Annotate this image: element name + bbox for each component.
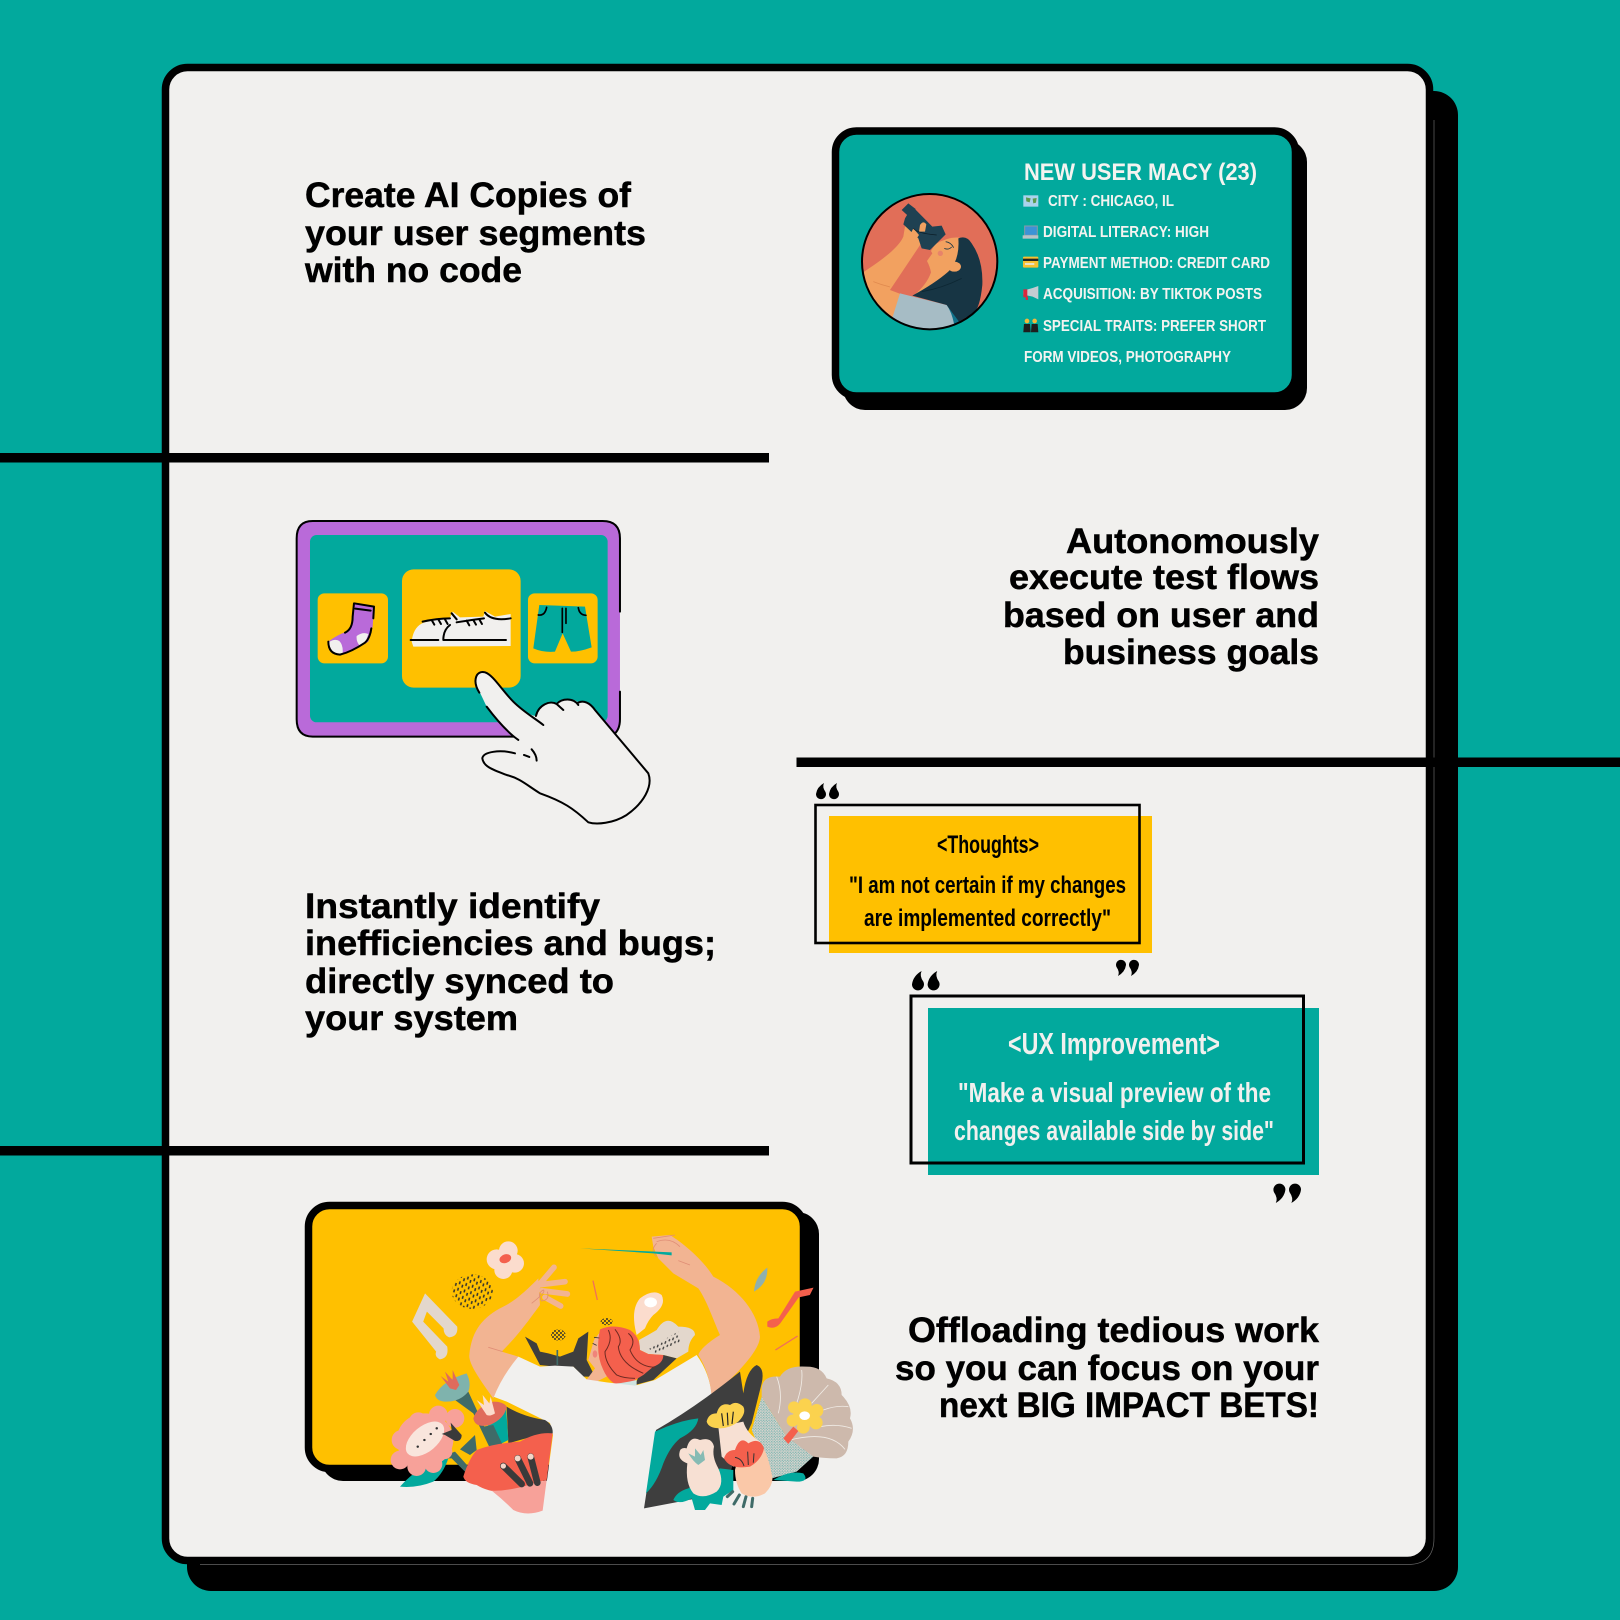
heading: autonomous test flows: Autonomously xyxy=(1066,522,1320,561)
opening quote mark xyxy=(816,783,839,799)
callout text: <Thoughts> xyxy=(937,831,1039,859)
heading: autonomous test flows: execute test flows xyxy=(1009,558,1319,597)
heading: autonomous test flows: based on user and xyxy=(1003,596,1319,635)
heading: offloading tedious work xyxy=(895,1311,1320,1425)
heading: autonomous test flows: business goals xyxy=(1063,633,1319,672)
outline frame xyxy=(911,996,1304,1163)
illustration: right flower bouquet xyxy=(644,1365,853,1510)
tablet body xyxy=(297,521,620,737)
persona card body xyxy=(836,131,1296,396)
heading: create AI copies xyxy=(304,176,646,290)
persona text: DIGITAL LITERACY: HIGH xyxy=(1043,224,1209,241)
floating flower xyxy=(487,1241,524,1279)
hair and head xyxy=(525,1332,595,1377)
heading: create AI copies: your user segments xyxy=(305,214,646,253)
heading: autonomous test flows xyxy=(1003,522,1320,672)
baton xyxy=(580,1248,672,1255)
persona text xyxy=(1024,159,1270,366)
persona text: SPECIAL TRAITS: PREFER SHORT xyxy=(1043,318,1266,335)
main card panel xyxy=(166,68,1430,1560)
heading: create AI copies: Create AI Copies of xyxy=(305,176,631,215)
product: sock xyxy=(318,593,388,663)
heading: instantly identify: your system xyxy=(305,999,518,1038)
callout text xyxy=(954,1026,1274,1146)
portrait: woman with binoculars xyxy=(858,194,997,332)
persona text: CITY : CHICAGO, IL xyxy=(1048,193,1174,210)
product: shorts xyxy=(528,593,598,663)
white shirt xyxy=(493,1355,712,1510)
hand pointer xyxy=(476,672,650,823)
heading: offloading tedious work: next BIG IMPACT BETS! xyxy=(939,1386,1319,1425)
panel: yellow conductor card xyxy=(308,1206,853,1513)
bubble and cloud xyxy=(634,1292,663,1335)
callout text: are implemented correctly" xyxy=(864,905,1111,932)
persona text: PAYMENT METHOD: CREDIT CARD xyxy=(1043,255,1270,272)
persona text: NEW USER MACY (23) xyxy=(1024,159,1257,186)
closing quote mark xyxy=(1273,1184,1301,1203)
conductor card shadow xyxy=(321,1212,819,1481)
heading: offloading tedious work: Offloading tedious work xyxy=(908,1311,1320,1350)
heading: instantly identify xyxy=(305,887,716,1038)
callout: thoughts quote xyxy=(816,783,1152,976)
illustration: tablet with touching hand xyxy=(297,521,650,823)
heading: instantly identify: directly synced to xyxy=(305,962,614,1001)
outline frame xyxy=(816,805,1140,943)
heading: instantly identify: Instantly identify xyxy=(305,887,601,926)
yellow backing xyxy=(829,816,1152,953)
callout text: "I am not certain if my changes xyxy=(849,872,1126,899)
persona text: ACQUISITION: BY TIKTOK POSTS xyxy=(1043,286,1262,303)
callout text: changes available side by side" xyxy=(954,1115,1274,1146)
persona card shadow xyxy=(843,140,1307,410)
persona text: FORM VIDEOS, PHOTOGRAPHY xyxy=(1024,349,1231,366)
illustration: left flower bouquet xyxy=(391,1370,553,1513)
arms xyxy=(469,1278,540,1398)
tablet screen xyxy=(310,535,608,722)
main card shadow xyxy=(187,91,1458,1591)
callout text xyxy=(849,831,1126,932)
opening quote mark xyxy=(912,971,940,990)
heading: instantly identify: inefficiencies and bugs; xyxy=(305,924,716,963)
product: sneakers xyxy=(402,569,521,688)
panel: persona card xyxy=(836,131,1307,410)
heading: create AI copies: with no code xyxy=(304,251,522,290)
heading: offloading tedious work: so you can focus on your xyxy=(895,1349,1319,1388)
closing quote mark xyxy=(1116,960,1139,976)
teal backing xyxy=(928,1008,1319,1175)
callout: UX improvement quote xyxy=(911,971,1319,1203)
music notes xyxy=(412,1288,814,1359)
persona emoji icons xyxy=(1023,195,1038,332)
illustration: conductor figure xyxy=(452,1235,767,1510)
callout text: <UX Improvement> xyxy=(1008,1026,1220,1061)
callout text: "Make a visual preview of the xyxy=(958,1077,1271,1108)
conductor card body xyxy=(308,1206,804,1468)
